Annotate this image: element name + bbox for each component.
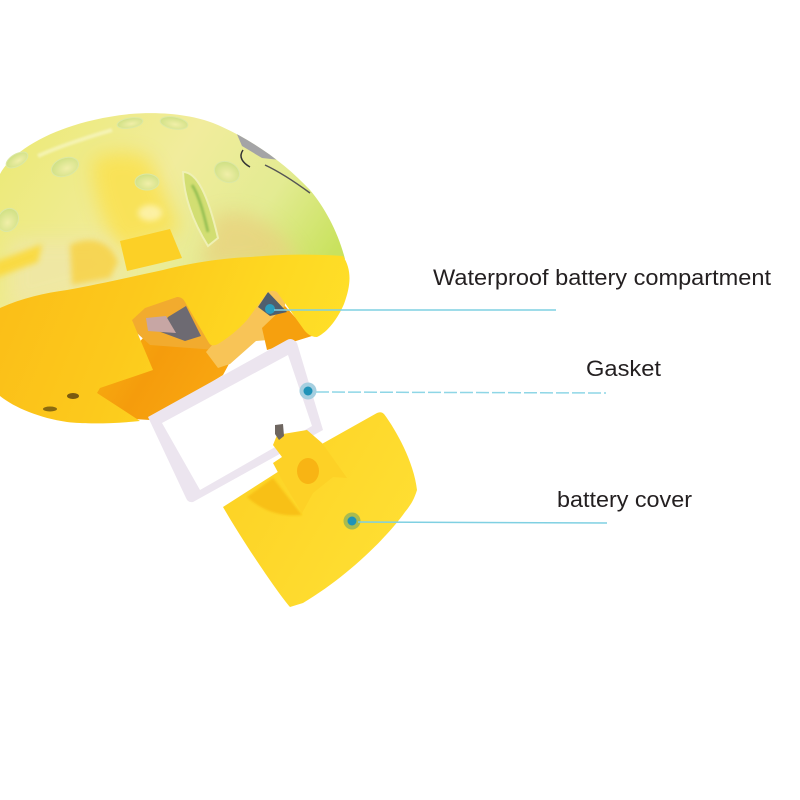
inner post xyxy=(120,229,182,271)
inner orange block xyxy=(96,330,230,420)
long bump xyxy=(183,172,218,246)
pale band between teeth xyxy=(206,288,285,368)
cover lug with hole xyxy=(273,430,347,513)
callout: gasket xyxy=(300,356,662,400)
interior backing behind left notch xyxy=(125,290,216,350)
callout: battery cover: battery cover xyxy=(557,487,693,512)
metal pin xyxy=(275,424,284,440)
callout: gasket: Gasket xyxy=(586,356,662,381)
cover side shading xyxy=(247,478,302,515)
toy ball: yellow half with translucent dome xyxy=(0,113,349,423)
callout: waterproof battery compartment: Waterproof battery compartment xyxy=(433,265,772,290)
right orange block xyxy=(262,306,312,350)
translucent dome xyxy=(0,113,345,320)
batteries inside xyxy=(158,306,201,341)
infographic: toy battery compartment diagram xyxy=(0,113,771,607)
callout: waterproof battery compartment xyxy=(265,265,772,314)
gasket xyxy=(148,339,323,502)
yellow lower shell xyxy=(0,255,350,423)
printed face lines on dome xyxy=(241,150,250,167)
battery cover xyxy=(223,412,417,607)
bumps on dome xyxy=(0,115,243,235)
vent holes xyxy=(67,393,79,399)
callout: battery cover xyxy=(344,487,693,530)
printed face patch xyxy=(237,134,276,160)
